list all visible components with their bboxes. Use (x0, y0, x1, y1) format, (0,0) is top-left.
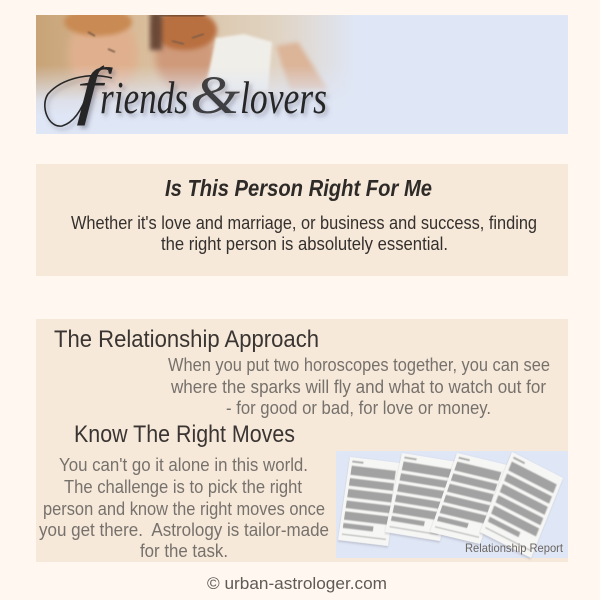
image: relationship report pages (336, 451, 568, 558)
banner logo wordmark (45, 55, 327, 126)
text block: horoscopes: When you put two horoscopes together, you can see (168, 355, 550, 375)
text block: tailor-made astrology: You can't go it alone in this world. (59, 455, 308, 475)
banner logo wordmark: riends (100, 73, 188, 123)
intro text block (71, 213, 537, 254)
banner logo wordmark: f (76, 55, 114, 126)
footer credit: © urban-astrologer.com (207, 574, 387, 593)
report page 2 (385, 453, 457, 541)
report page 1 (338, 457, 400, 546)
text block: horoscopes (168, 355, 550, 418)
text block: horoscopes: - for good or bad, for love or money. (226, 398, 491, 418)
report page 4 (480, 452, 563, 558)
banner: friends & lovers (36, 8, 568, 134)
panel: is this person right for me (36, 164, 568, 276)
text block: tailor-made astrology (39, 455, 329, 561)
text block: tailor-made astrology: person and know the right moves once (43, 499, 325, 519)
report caption: Relationship Report (465, 541, 564, 555)
report page 3 (430, 453, 507, 544)
heading: know the right moves: Know The Right Moves (74, 421, 295, 448)
intro text block: Whether it's love and marriage, or business and success, finding (71, 213, 537, 233)
banner photo: couple (36, 15, 342, 106)
heading: the relationship approach: The Relationship Approach (54, 326, 319, 353)
text block: tailor-made astrology: you get there. Astrology is tailor-made (39, 520, 329, 540)
panel: relationship content (36, 319, 568, 562)
text block: horoscopes: where the sparks will fly and what to watch out for (170, 377, 546, 397)
intro text block: the right person is absolutely essential. (161, 234, 448, 254)
text block: tailor-made astrology: for the task. (140, 541, 228, 561)
banner logo wordmark: & (190, 65, 240, 125)
text block: tailor-made astrology: The challenge is to pick the right (64, 477, 302, 497)
heading: is this person right for me: Is This Person Right For Me (165, 175, 432, 201)
banner logo wordmark: lovers (240, 73, 327, 123)
